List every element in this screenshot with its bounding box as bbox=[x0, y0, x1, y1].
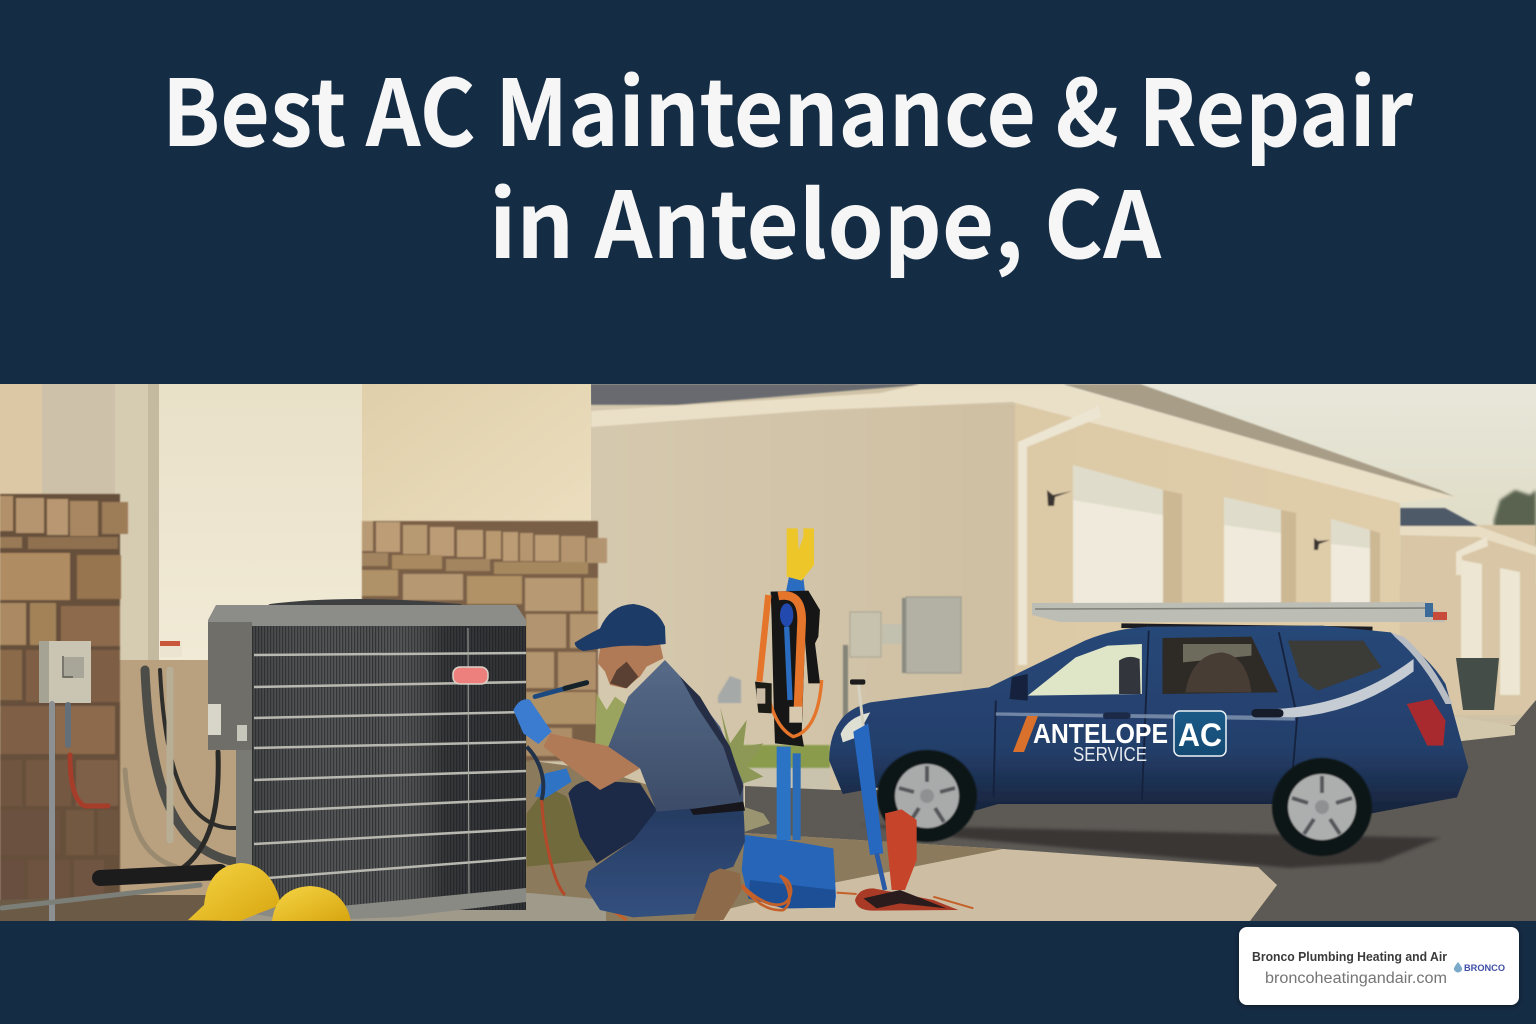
grille bbox=[252, 626, 526, 910]
rear silver roof edge bbox=[1391, 632, 1452, 704]
scene base bbox=[0, 384, 1536, 921]
title bbox=[162, 40, 1414, 285]
red and blue service tool bbox=[837, 679, 973, 911]
windows bbox=[1028, 644, 1142, 696]
card company name: Bronco Plumbing Heating and Air bbox=[1252, 950, 1447, 964]
garage doors bbox=[1072, 500, 1164, 603]
asphalt driveway bbox=[745, 700, 1536, 921]
AC badge: AC bbox=[1178, 717, 1222, 753]
downspout bbox=[1018, 404, 1101, 665]
rear wheel bbox=[1272, 758, 1372, 856]
left stucco wall bbox=[0, 384, 42, 499]
wall-mounted panel bbox=[115, 384, 362, 660]
tree bbox=[1494, 490, 1536, 545]
front wall bbox=[590, 405, 1020, 750]
title: in Antelope, CA bbox=[489, 152, 1162, 285]
front leg bbox=[585, 803, 745, 917]
logo wordmark: ANTELOPE bbox=[1033, 718, 1168, 749]
door logo bbox=[1013, 711, 1226, 766]
shirt bbox=[608, 660, 743, 812]
lid bbox=[208, 605, 526, 628]
main building bbox=[591, 384, 1453, 674]
kerb island bbox=[1456, 725, 1515, 742]
logo sub-wordmark: SERVICE bbox=[1073, 744, 1147, 766]
green lawn and kerb bbox=[743, 744, 831, 769]
silhouettes bbox=[1119, 657, 1141, 694]
concrete walkway bbox=[720, 849, 1277, 921]
left stone wall bbox=[0, 494, 128, 904]
shadow under car bbox=[860, 825, 1440, 868]
rear glove bbox=[535, 768, 572, 798]
fascia bbox=[591, 384, 1455, 503]
front wheel bbox=[877, 750, 977, 842]
silver swoosh bbox=[1277, 659, 1414, 717]
conduit and refrigerant pipes bbox=[2, 670, 236, 921]
ground left bbox=[0, 895, 222, 921]
source credit card bbox=[1239, 927, 1519, 1005]
hero photo scene bbox=[0, 384, 1536, 921]
orange hose on the ground bbox=[742, 876, 791, 905]
forearm bbox=[543, 733, 640, 790]
door trim bbox=[1163, 490, 1380, 610]
red hose bbox=[542, 800, 565, 895]
orange slash bbox=[1013, 716, 1038, 752]
cap bbox=[575, 604, 666, 651]
hard hats bbox=[188, 863, 351, 921]
stone ledge bbox=[0, 494, 128, 532]
lower frame bbox=[236, 750, 252, 865]
card logo: BRONCO bbox=[1464, 963, 1505, 973]
belt bbox=[690, 802, 745, 815]
brand badge bbox=[453, 667, 488, 684]
plants and shrubs bbox=[527, 693, 770, 867]
yellow clamp bbox=[787, 528, 814, 581]
orange straps bbox=[759, 595, 768, 682]
card website: broncoheatingandair.com bbox=[1265, 970, 1447, 987]
side wall bbox=[1015, 400, 1400, 690]
black harness straps bbox=[771, 591, 820, 747]
electrical boxes on wall bbox=[718, 597, 961, 730]
roof bbox=[591, 384, 920, 406]
left service panel bbox=[208, 622, 252, 750]
neck and face bbox=[598, 643, 663, 688]
mirror bbox=[1009, 674, 1028, 701]
door handles bbox=[1251, 709, 1283, 717]
second building bbox=[1400, 508, 1536, 715]
trash bin bbox=[1456, 658, 1499, 710]
headlight bbox=[841, 712, 870, 742]
right stucco wall bbox=[362, 384, 591, 554]
horizontal guard wires bbox=[254, 653, 526, 878]
base bbox=[742, 835, 836, 908]
wall lamps bbox=[1047, 490, 1072, 506]
AC condenser unit bbox=[208, 599, 526, 921]
upper mast bbox=[786, 563, 805, 592]
hat 1 bbox=[188, 863, 281, 921]
concrete pad under AC bbox=[220, 893, 606, 921]
door lines bbox=[994, 631, 1297, 801]
service SUV bbox=[829, 602, 1468, 868]
fan top bbox=[268, 599, 462, 605]
taillight bbox=[1407, 699, 1446, 746]
hat 2 bbox=[272, 886, 351, 921]
blue equipment stand bbox=[742, 528, 836, 908]
blue carabiner bbox=[780, 603, 793, 627]
wall under panel bbox=[120, 660, 236, 895]
title: Best AC Maintenance & Repair bbox=[162, 40, 1414, 173]
lower masts bbox=[777, 747, 791, 840]
bottom rail bbox=[252, 888, 526, 921]
gravel bed bbox=[526, 760, 1003, 921]
technician bbox=[513, 604, 789, 920]
front glove bbox=[513, 699, 552, 744]
boot bbox=[693, 868, 742, 920]
strap pads bbox=[755, 682, 772, 713]
right stone wall bbox=[362, 521, 607, 761]
outdoor electrical disconnect box bbox=[39, 641, 91, 703]
back thigh bbox=[568, 781, 667, 863]
suspender shadow bbox=[680, 677, 743, 797]
ladder bbox=[1032, 602, 1447, 622]
gauge tool bbox=[535, 683, 587, 697]
car body in reference coordinates bbox=[829, 626, 1468, 814]
sky bbox=[1062, 384, 1536, 584]
